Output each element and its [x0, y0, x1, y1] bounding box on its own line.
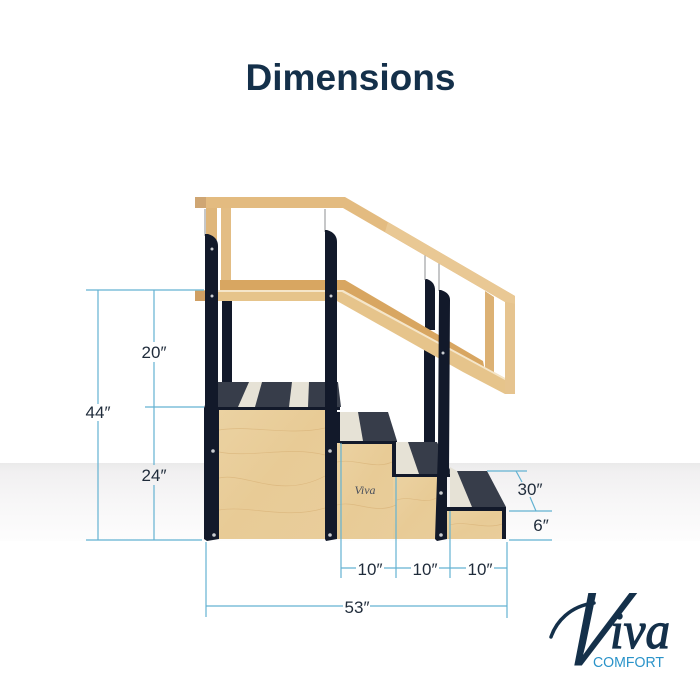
title: Dimensions [246, 57, 456, 98]
third tread [392, 442, 452, 477]
bottom tread [447, 467, 506, 539]
logo wordmark remainder: iva [610, 603, 670, 660]
label: 24 inches: 24″ [142, 466, 166, 485]
dimension lines [86, 290, 552, 618]
label: 44 inches: 44″ [86, 403, 110, 422]
label: 10 inches third: 10″ [468, 560, 492, 579]
lower handrail [195, 280, 505, 394]
back support posts [424, 279, 435, 444]
wood grain [219, 428, 502, 526]
top platform tread [218, 382, 341, 410]
bolts [210, 248, 444, 537]
label: 53 inches: 53″ [345, 598, 369, 617]
second tread [340, 412, 397, 477]
step treads [218, 382, 506, 539]
front black posts [204, 230, 450, 541]
stair unit illustration [195, 197, 515, 541]
rear left post [222, 301, 232, 382]
plywood step boxes [218, 408, 503, 539]
floor shading [0, 463, 700, 541]
label: 20 inches: 20″ [142, 343, 166, 362]
support wires [205, 209, 439, 291]
label: 6 inches: 6″ [533, 516, 549, 535]
dimension labels [86, 343, 549, 617]
label: 10 inches second: 10″ [413, 560, 437, 579]
label: 10 inches first: 10″ [358, 560, 382, 579]
brand logo [543, 572, 670, 688]
label: 30 inches: 30″ [518, 480, 542, 499]
logo flourish [551, 603, 594, 637]
small logo on the box: Viva [354, 483, 376, 497]
logo wordmark initial: V [543, 572, 647, 688]
logo subtitle: COMFORT [593, 655, 664, 671]
upper handrail [195, 197, 515, 394]
